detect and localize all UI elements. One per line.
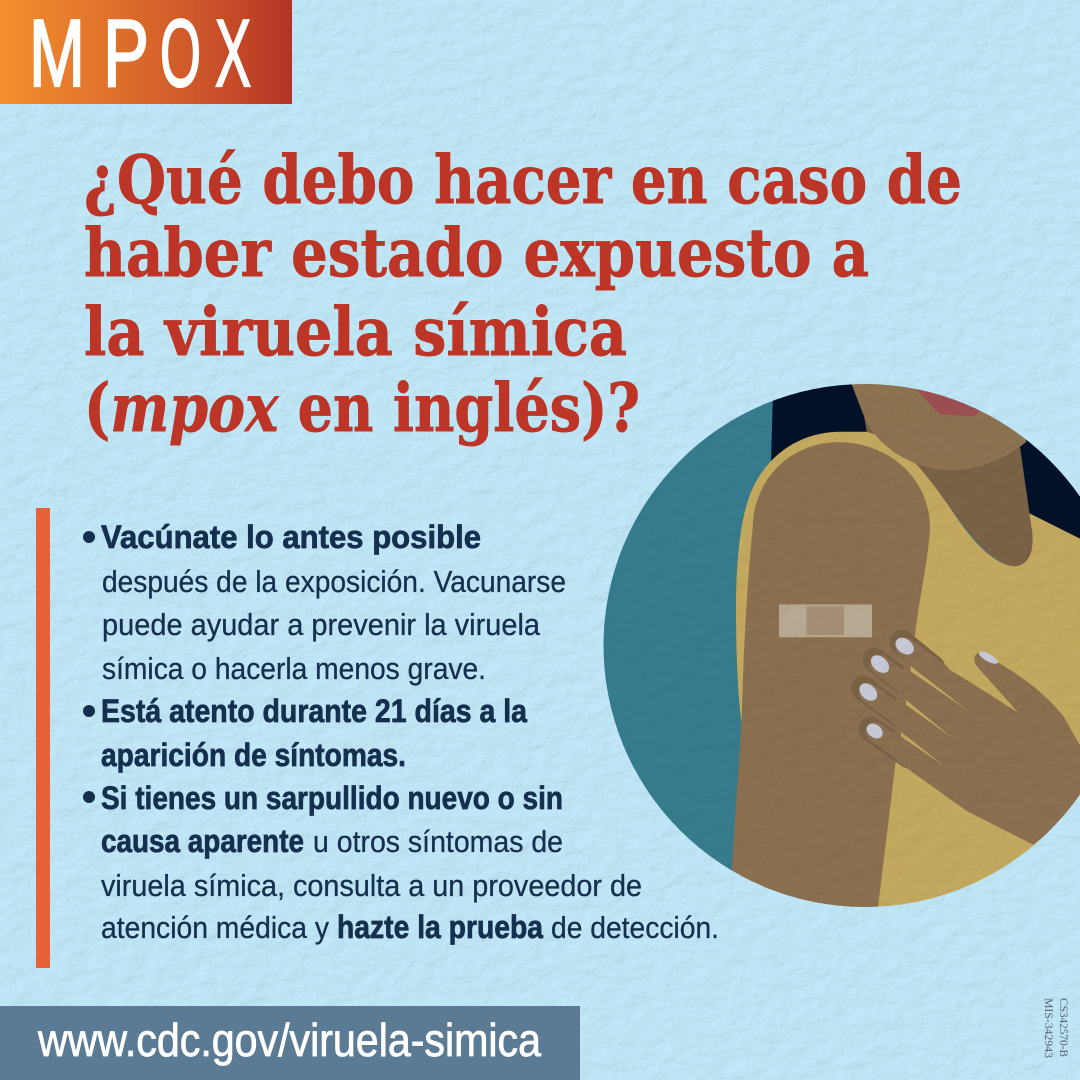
bullet two [83,693,527,773]
title: haber estado expuesto a [84,214,869,292]
bullet two: Está atento durante 21 días a la [101,693,527,729]
bandage [779,604,872,637]
bullet two: aparición de síntomas. [101,737,406,773]
website bar [0,1006,580,1080]
bullet three: u otros síntomas de [313,824,563,859]
fingernails [856,634,999,742]
title: (mpox en inglés)? [84,369,640,447]
illustration: arm with bandage [600,380,1080,932]
publication codes: CS342570-B [1057,998,1071,1057]
bullet three: hazte la prueba [337,909,543,945]
yellow shirt [733,432,1080,932]
bullet one: Vacúnate lo antes posible [101,519,481,555]
navy background behind person [771,380,1080,542]
title: la viruela símica [84,293,627,371]
bullet three: atención médica y [101,910,329,945]
title [84,141,962,447]
bullet three [83,780,719,945]
lips [916,389,980,416]
upper arm [732,442,930,932]
bullet one: puede ayudar a prevenir la viruela [102,607,541,642]
header banner: MPOX: M [29,0,85,107]
header banner: MPOX [0,0,292,107]
hand [856,634,1080,845]
face and chin [850,380,1033,470]
website bar: www.cdc.gov/viruela-simica [37,1014,541,1066]
bullet three: Si tienes un sarpullido nuevo o sin [101,780,563,816]
bullet three: viruela símica, consulta a un proveedor de [101,868,642,903]
accent bar [36,508,50,968]
header banner: MPOX: O [160,0,201,107]
publication codes: MIS-342943 [1042,998,1056,1058]
neck shadow [863,411,1033,566]
bullet three: causa aparente [101,823,304,859]
finger gaps [901,666,968,765]
bullet one: símica o hacerla menos grave. [102,651,486,686]
bullet one [83,519,566,686]
bullet list [83,519,719,945]
publication codes [1042,998,1071,1058]
bullet three: de detección. [551,910,719,945]
header banner: MPOX: P [103,0,149,107]
header banner: MPOX: X [215,0,251,107]
bullet one: después de la exposición. Vacunarse [102,564,566,599]
